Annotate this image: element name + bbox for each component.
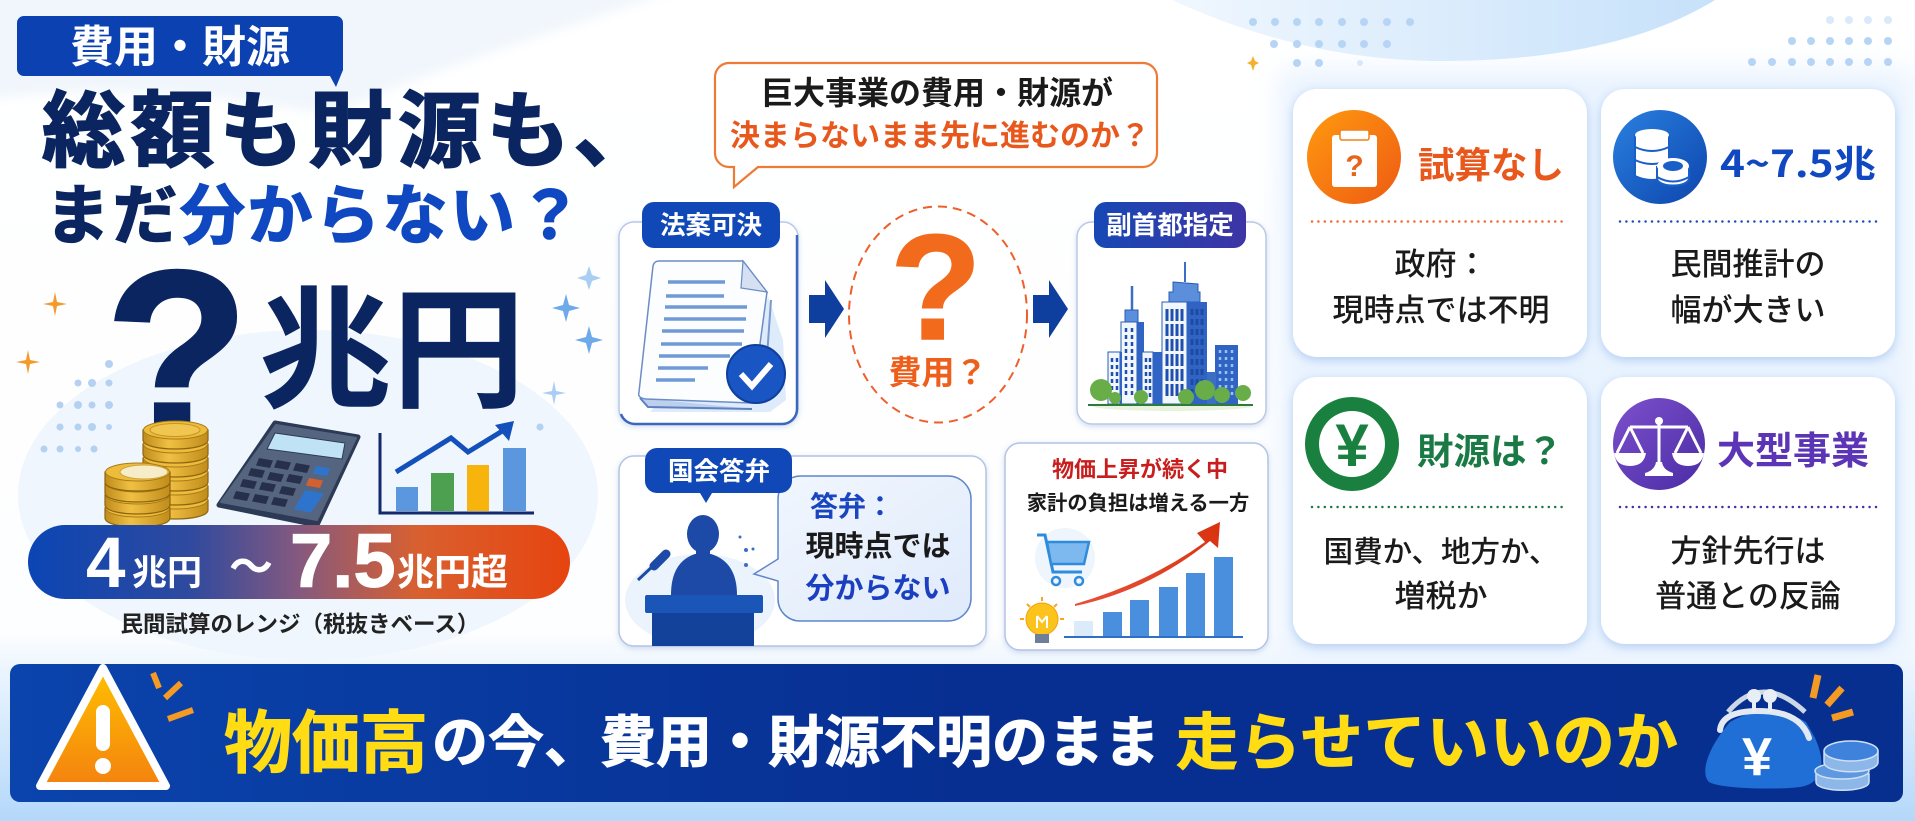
range pill: 兆円超 bbox=[397, 542, 508, 596]
card: no estimate: 現時点では不明 bbox=[1332, 285, 1550, 330]
tag: category label bbox=[17, 11, 343, 87]
card: funding source: 増税か bbox=[1394, 571, 1488, 616]
banner message: 走らせていいのか bbox=[1176, 692, 1679, 782]
chart: rising bars bbox=[380, 421, 534, 513]
speech bubble: answer: 分からない bbox=[805, 565, 951, 607]
icon: calculator bbox=[219, 423, 358, 525]
card: private estimate range: 4~7.5兆 bbox=[1720, 134, 1876, 188]
panel: rising prices bbox=[1005, 443, 1268, 650]
banner bbox=[10, 664, 1903, 802]
range pill: 7.5 bbox=[290, 519, 396, 604]
main title: まだ分からない？ bbox=[45, 163, 585, 257]
big question mark and amount bbox=[114, 268, 516, 423]
label: Diet answer bbox=[645, 448, 792, 503]
panel: cost unknown bbox=[849, 203, 1027, 422]
big question mark and amount: ? bbox=[105, 222, 249, 486]
card: large project bbox=[1601, 377, 1895, 644]
icon: speaker at podium bbox=[638, 515, 763, 646]
panel: sub-capital designation bbox=[1077, 202, 1266, 424]
range pill: 兆円 bbox=[132, 545, 202, 596]
card: no estimate: 政府： bbox=[1394, 239, 1488, 284]
icon: coins bbox=[1613, 110, 1707, 204]
banner message: 物価高 bbox=[224, 688, 428, 787]
panel: rising prices: 家計の負担は増える一方 bbox=[1027, 486, 1249, 516]
tag: category label: 費用・財源 bbox=[70, 11, 290, 75]
label: bill passed bbox=[642, 202, 780, 248]
main title bbox=[42, 88, 605, 246]
range pill bbox=[28, 525, 570, 599]
speech bubble: answer: 現時点では bbox=[805, 523, 951, 565]
card: funding source: 国費か、地方か、 bbox=[1324, 529, 1558, 571]
big question mark and amount: 兆円 bbox=[259, 244, 525, 436]
card: no estimate: 試算なし bbox=[1418, 136, 1564, 189]
card: private estimate range: 幅が大きい bbox=[1670, 285, 1826, 330]
speech bubble: answer bbox=[754, 476, 971, 621]
icon: clipboard: ? bbox=[1345, 150, 1364, 183]
callout: question: 巨大事業の費用・財源が bbox=[761, 68, 1113, 114]
callout: question: 決まらないまま先に進むのか？ bbox=[730, 111, 1150, 155]
main title: 総額も財源も、 bbox=[42, 64, 663, 184]
panel: Diet answer bbox=[619, 448, 986, 646]
icon: shopping cart bbox=[1035, 528, 1095, 588]
label: bill passed: 法案可決 bbox=[660, 205, 762, 242]
icon: yen ring bbox=[1305, 397, 1399, 491]
card: funding source: 財源は？ bbox=[1417, 422, 1563, 475]
range pill: ～ bbox=[229, 531, 273, 595]
card: no estimate bbox=[1293, 89, 1587, 357]
speech bubble: answer: 答弁： bbox=[810, 485, 894, 525]
label: designation: 副首都指定 bbox=[1106, 205, 1234, 242]
icon: yen ring: ¥ bbox=[1335, 412, 1369, 479]
callout: question bbox=[715, 63, 1157, 187]
card: large project: 方針先行は bbox=[1670, 526, 1826, 571]
icon: scales bbox=[1613, 398, 1705, 490]
icon: light bulb bbox=[1020, 597, 1064, 643]
icon: purse and coins bbox=[1705, 675, 1878, 790]
banner message: の今、費用・財源不明のまま bbox=[432, 698, 1160, 779]
decorative sparkles and dots bbox=[16, 266, 603, 452]
panel: rising prices: 物価上昇が続く中 bbox=[1052, 452, 1228, 484]
label: designation bbox=[1094, 202, 1246, 248]
icon: clipboard bbox=[1307, 110, 1401, 204]
card: private estimate range bbox=[1601, 89, 1895, 357]
icon: check badge bbox=[727, 345, 785, 403]
range caption: 民間試算のレンジ（税抜きベース） bbox=[121, 607, 479, 639]
card: large project: 普通との反論 bbox=[1655, 571, 1841, 616]
icon: warning triangle bbox=[40, 668, 193, 786]
chart: rising household burden bbox=[1064, 522, 1243, 637]
panel: bill passed bbox=[619, 202, 798, 424]
panel: cost unknown: ? bbox=[890, 203, 982, 371]
label: Diet answer: 国会答弁 bbox=[668, 451, 770, 488]
card: large project: 大型事業 bbox=[1717, 420, 1869, 475]
icon: purse and coins: ¥ bbox=[1742, 727, 1772, 787]
card: private estimate range: 民間推計の bbox=[1670, 239, 1826, 284]
panel: cost unknown: 費用？ bbox=[888, 346, 988, 394]
arrow: to question bbox=[809, 280, 844, 338]
icon: coin stacks bbox=[105, 421, 208, 527]
icon: document bbox=[639, 261, 786, 412]
arrow: to designation bbox=[1033, 280, 1068, 338]
icon: buildings bbox=[1088, 262, 1253, 411]
card: funding source bbox=[1293, 377, 1587, 644]
range pill: 4 bbox=[86, 524, 126, 603]
